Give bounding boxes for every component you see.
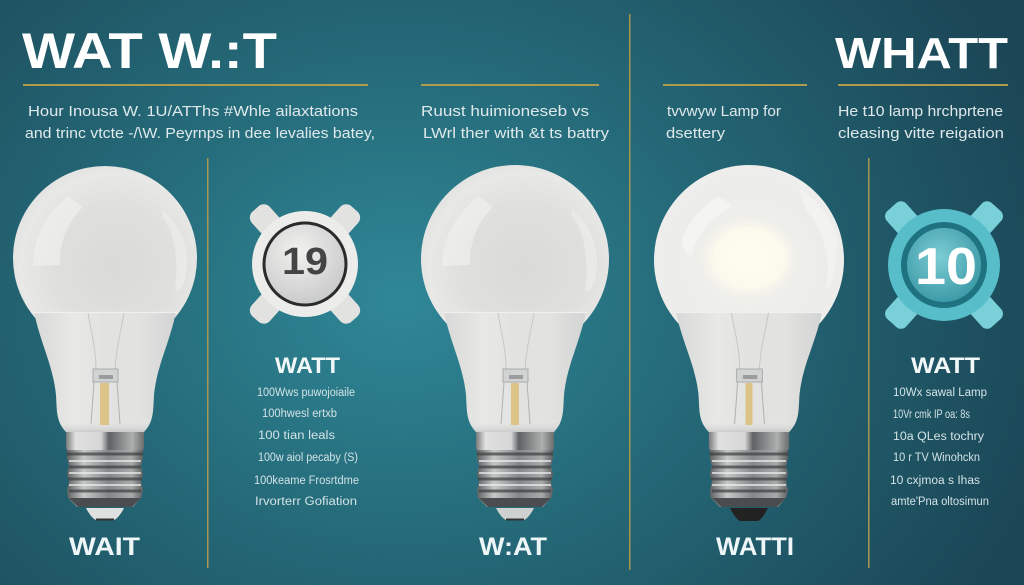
panel: 19 watt list xyxy=(254,353,359,508)
text block: 19 watt specs xyxy=(254,387,359,508)
icon: middle bulb xyxy=(421,165,609,520)
label: left bulb: WAIT xyxy=(69,533,140,561)
text block: 19 watt specs: 100hwesl ertxb xyxy=(262,408,337,420)
icon: 19 watt badge xyxy=(247,201,363,327)
icon: right glowing bulb xyxy=(654,165,844,521)
icon: left bulb xyxy=(13,166,197,520)
text block: left description: Hour Inousa W. 1U/ATThs #Whle ailaxtations xyxy=(28,103,358,120)
text block: 19 watt specs: 100w aiol pecaby (S) xyxy=(258,452,358,464)
title: left: WAT W.:T xyxy=(22,23,277,79)
panel: 10 watt list xyxy=(890,353,989,508)
icon: 10 watt badge xyxy=(882,198,1006,332)
text block: 19 watt specs: 100 tian leals xyxy=(258,430,335,442)
gold rule xyxy=(421,84,599,86)
title: right: WHATT xyxy=(835,29,1008,78)
text block: left description: and trinc vtcte -/\W. Peyrnps in dee levalies batey, xyxy=(25,125,375,142)
text block: 10 watt specs xyxy=(890,387,989,508)
panel: lamp header xyxy=(663,84,807,142)
text block: lamp description xyxy=(666,103,781,142)
gold rule xyxy=(838,84,1008,86)
text block: middle description: Ruust huimioneseb vs xyxy=(421,103,589,120)
panel: right watt header xyxy=(835,29,1008,142)
text block: 10 watt specs: 10 r TV Winohckn xyxy=(893,452,980,464)
text block: right description: cleasing vitte reigation xyxy=(838,125,1004,142)
label: right bulb: WATTI xyxy=(716,533,794,561)
text block: left description xyxy=(25,103,375,142)
heading: watt: WATT xyxy=(911,353,981,378)
text block: middle description: LWrl ther with &t ts battry xyxy=(423,125,610,142)
number: 10: 10 xyxy=(915,238,977,296)
gold rule xyxy=(663,84,807,86)
text block: 19 watt specs: Irvorterr Gofiation xyxy=(255,496,357,508)
text block: 10 watt specs: 10Vr cmk IP oa: 8s xyxy=(893,409,970,421)
text block: 10 watt specs: 10 cxjmoa s Ihas xyxy=(890,475,980,487)
text block: 10 watt specs: amte'Pna oltosimun xyxy=(891,496,989,508)
text block: 10 watt specs: 10Wx sawal Lamp xyxy=(893,387,987,399)
text block: lamp description: tvvwyw Lamp for xyxy=(667,103,781,120)
text block: right description xyxy=(838,103,1004,142)
text block: 19 watt specs: 100keame Frosrtdme xyxy=(254,475,359,487)
text block: 19 watt specs: 100Wws puwojoiaile xyxy=(257,387,355,399)
text block: middle description xyxy=(421,103,610,142)
panel: left watt header xyxy=(22,23,375,142)
heading: watt: WATT xyxy=(275,353,341,378)
label: middle bulb: W:AT xyxy=(479,533,547,561)
panel: middle header xyxy=(421,84,610,142)
text block: right description: He t10 lamp hrchprtene xyxy=(838,103,1003,120)
text block: lamp description: dsettery xyxy=(666,125,726,142)
gold rule xyxy=(23,84,368,86)
text block: 10 watt specs: 10a QLes tochry xyxy=(893,431,984,443)
number: 19: 19 xyxy=(282,241,328,283)
